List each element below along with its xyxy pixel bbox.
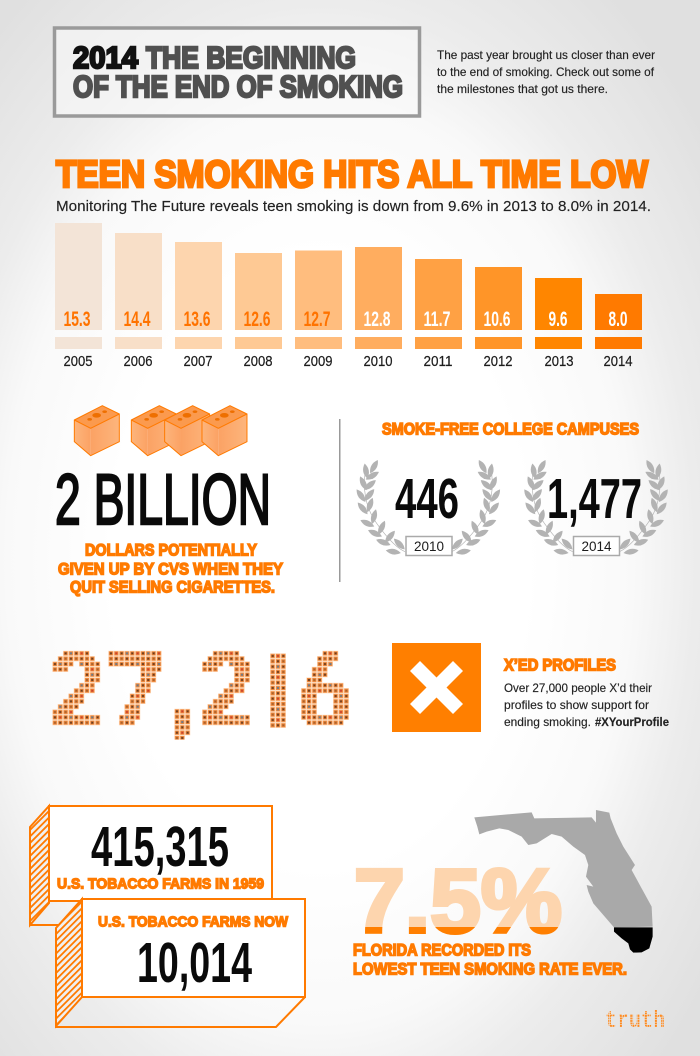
- year labels: 2011: [424, 354, 452, 370]
- farms box 1959: [30, 806, 272, 925]
- big number: 7.5%: [356, 867, 562, 935]
- big number: 7.5%: 7.5%: [354, 852, 562, 952]
- year labels: 2012: [484, 354, 512, 370]
- bar chart: [55, 223, 642, 370]
- caption: cvs: DOLLARS POTENTIALLY: [85, 542, 257, 560]
- caption: cvs: QUIT SELLING CIGARETTES.: [70, 578, 275, 596]
- year labels: 2013: [544, 354, 574, 370]
- year box: [406, 536, 452, 556]
- label: U.S. TOBACCO FARMS NOW: [98, 914, 289, 930]
- number 446: 446: [395, 467, 459, 531]
- bar values: 15.3: [64, 308, 90, 331]
- year box: [574, 536, 620, 556]
- year labels: 2007: [184, 354, 212, 370]
- bar values: 9.6: [548, 308, 568, 331]
- title text: [73, 40, 403, 104]
- icon: cash bricks: [74, 406, 247, 456]
- bar values: 13.6: [184, 308, 210, 331]
- x'ed profiles text: [504, 656, 669, 729]
- bar values: 8.0: [608, 308, 628, 331]
- body: ending smoking.: [504, 715, 591, 729]
- caption: florida: LOWEST TEEN SMOKING RATE EVER.: [353, 960, 627, 978]
- year box: 2014: [581, 539, 612, 554]
- bar values: [64, 308, 628, 331]
- intro text: to the end of smoking. Check out some of: [437, 65, 655, 79]
- bar values: 14.4: [124, 308, 151, 331]
- year labels: 2006: [124, 354, 152, 370]
- icon: orange x square: [392, 643, 481, 732]
- body: #XYourProfile: [595, 715, 669, 729]
- body: profiles to show support for: [504, 698, 649, 712]
- farms box now: [56, 899, 305, 1027]
- label: U.S. TOBACCO FARMS IN 1959: [57, 876, 264, 892]
- number: 10,014: [137, 931, 252, 995]
- bar values: 12.6: [244, 308, 270, 331]
- heading: X’ED PROFILES: [504, 656, 616, 674]
- body: [504, 681, 669, 729]
- bar values: 11.7: [424, 308, 450, 331]
- map: florida: [474, 810, 653, 953]
- year labels: 2008: [244, 354, 272, 370]
- title text: 2014: [73, 40, 139, 75]
- intro text: the milestones that got us there.: [437, 82, 608, 96]
- year labels: 2005: [64, 354, 92, 370]
- caption: florida: FLORIDA RECORDED ITS: [353, 942, 531, 960]
- bar values: 10.6: [484, 308, 510, 331]
- year labels: 2010: [364, 354, 392, 370]
- caption: florida: [353, 942, 627, 978]
- title box: [54, 28, 420, 116]
- big number: 7.5%: 7.5%: [354, 852, 562, 952]
- big number: 2 billion: 2 BILLION: [55, 460, 271, 540]
- intro text: The past year brought us closer than ever: [437, 48, 655, 62]
- heading: smoke-free campuses: SMOKE-FREE COLLEGE CAMPUSES: [382, 420, 639, 438]
- icon: laurel wreath: [354, 459, 502, 556]
- body: Over 27,000 people X’d their: [504, 681, 652, 695]
- icon: laurel wreath: [522, 459, 670, 556]
- caption: cvs: GIVEN UP BY CVS WHEN THEY: [58, 560, 283, 578]
- year labels: 2009: [304, 354, 332, 370]
- subheading: Monitoring The Future reveals teen smoking is down from 9.6% in 2013 to 8.0% in 2014.: [56, 198, 651, 215]
- year labels: [64, 354, 632, 370]
- bar values: 12.8: [364, 308, 391, 331]
- year box: 2010: [414, 539, 444, 554]
- title text: OF THE END OF SMOKING: [73, 69, 403, 104]
- intro text: [437, 48, 655, 96]
- year labels: 2014: [604, 354, 632, 370]
- mosaic number: 27,216: [52, 651, 349, 740]
- number: 415,315: [91, 815, 229, 879]
- laurel 2014: [522, 459, 670, 556]
- laurel 2010: [354, 459, 502, 556]
- title text: THE BEGINNING: [146, 40, 356, 75]
- logo: truth: truth: [605, 1008, 665, 1035]
- number 1,477: 1,477: [547, 467, 642, 531]
- bar values: 12.7: [304, 308, 330, 331]
- caption: cvs: [58, 542, 283, 596]
